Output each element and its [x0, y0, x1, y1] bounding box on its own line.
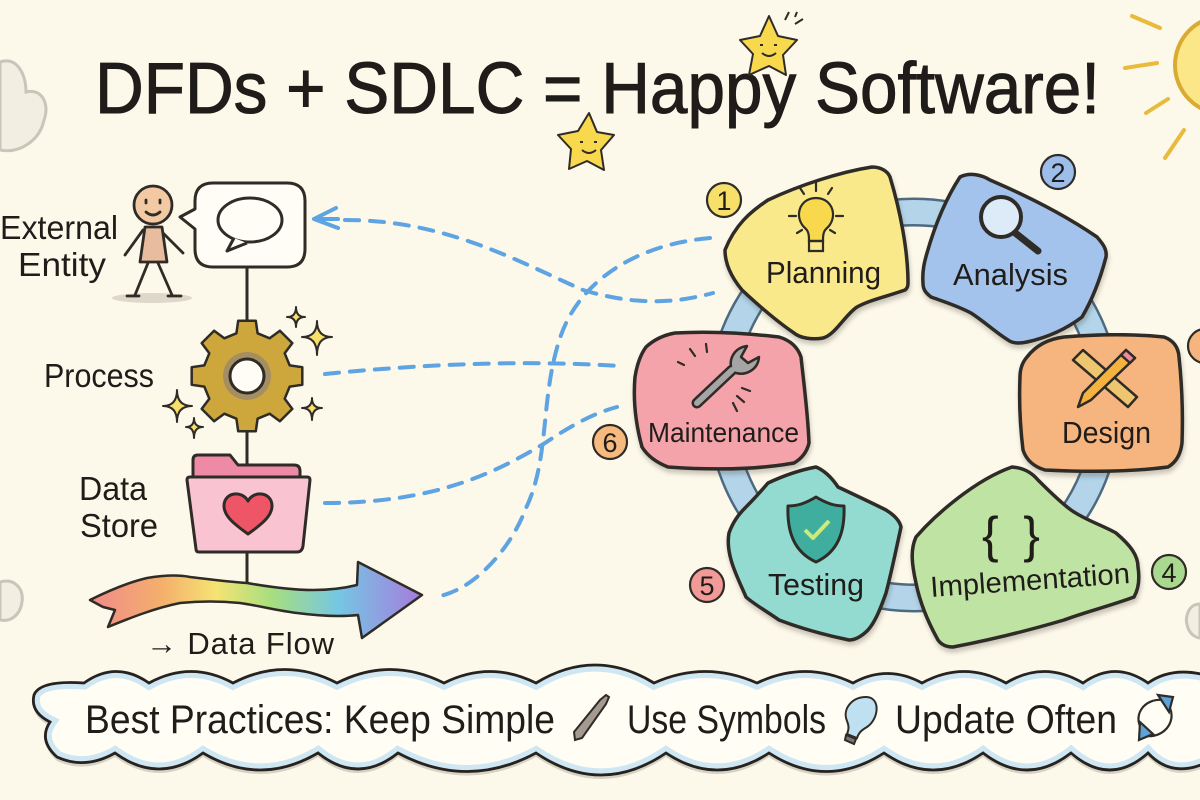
icon: star bottom [558, 113, 614, 170]
speech box [180, 183, 305, 267]
ring [721, 212, 1107, 598]
panel: maintenance: Maintenance [648, 417, 799, 448]
banner: best practices: Use Symbols [627, 698, 826, 742]
icon: pencil and ruler [1073, 350, 1137, 407]
panel: planning [725, 167, 908, 339]
banner: best practices: Update Often [895, 698, 1117, 742]
arrowhead [314, 208, 338, 228]
badge 4: 4 [1161, 558, 1177, 588]
label: process: Process [44, 357, 154, 394]
badge 1: 1 [716, 186, 732, 216]
badge 2: 2 [1050, 158, 1066, 188]
dashed flows [325, 220, 713, 596]
badge 5 [690, 568, 724, 602]
badge 3 [1188, 329, 1200, 363]
icon: sun [1125, 16, 1200, 158]
panel: implementation: { } [982, 507, 1040, 563]
icon: cloud small right [1186, 604, 1200, 638]
icon: cloud small left [0, 581, 22, 620]
icon: star top [740, 12, 803, 75]
icon: magnifier [981, 197, 1038, 251]
panel: design: Design [1062, 415, 1151, 450]
label: data store: Store [80, 507, 158, 544]
badge 6: 6 [602, 428, 618, 458]
label: external entity: External [0, 209, 118, 246]
panel: maintenance [634, 332, 809, 469]
icon: pen [574, 695, 609, 740]
badge 4 [1152, 555, 1186, 589]
panel: implementation [912, 467, 1139, 647]
icon: sparkles [163, 307, 332, 438]
panel: testing [728, 467, 901, 640]
panel: design [1020, 335, 1182, 471]
icon: shield [788, 497, 844, 562]
badge 2 [1041, 155, 1075, 189]
connector line [246, 265, 248, 585]
panel: testing: Testing [768, 567, 864, 602]
icon: folder [187, 455, 310, 552]
panel: planning: Planning [766, 255, 881, 290]
label: external entity [0, 209, 118, 283]
banner: best practices [33, 665, 1200, 779]
icon: bulb [789, 183, 843, 251]
icon: cloud left [0, 61, 46, 151]
icon: bulb small [845, 697, 877, 744]
arrow: rainbow data flow [90, 562, 422, 638]
icon: wrench [678, 344, 759, 411]
badge 1 [707, 183, 741, 217]
icon: refresh [1138, 695, 1173, 740]
icon: gear [192, 321, 302, 431]
badge 5: 5 [699, 571, 715, 601]
banner: best practices: Best Practices: Keep Simple [85, 698, 555, 742]
panel: analysis: Analysis [953, 257, 1068, 292]
label: data flow: → Data Flow [146, 626, 335, 661]
panel: implementation: Implementation [929, 558, 1131, 604]
badge 6 [593, 425, 627, 459]
icon: stick figure [112, 186, 192, 303]
label: data store: Data [79, 470, 148, 507]
title: DFDs + SDLC = Happy Software! [95, 49, 1100, 129]
label: data store [79, 470, 158, 544]
panel: analysis [923, 174, 1106, 343]
label: external entity: Entity [18, 246, 107, 283]
